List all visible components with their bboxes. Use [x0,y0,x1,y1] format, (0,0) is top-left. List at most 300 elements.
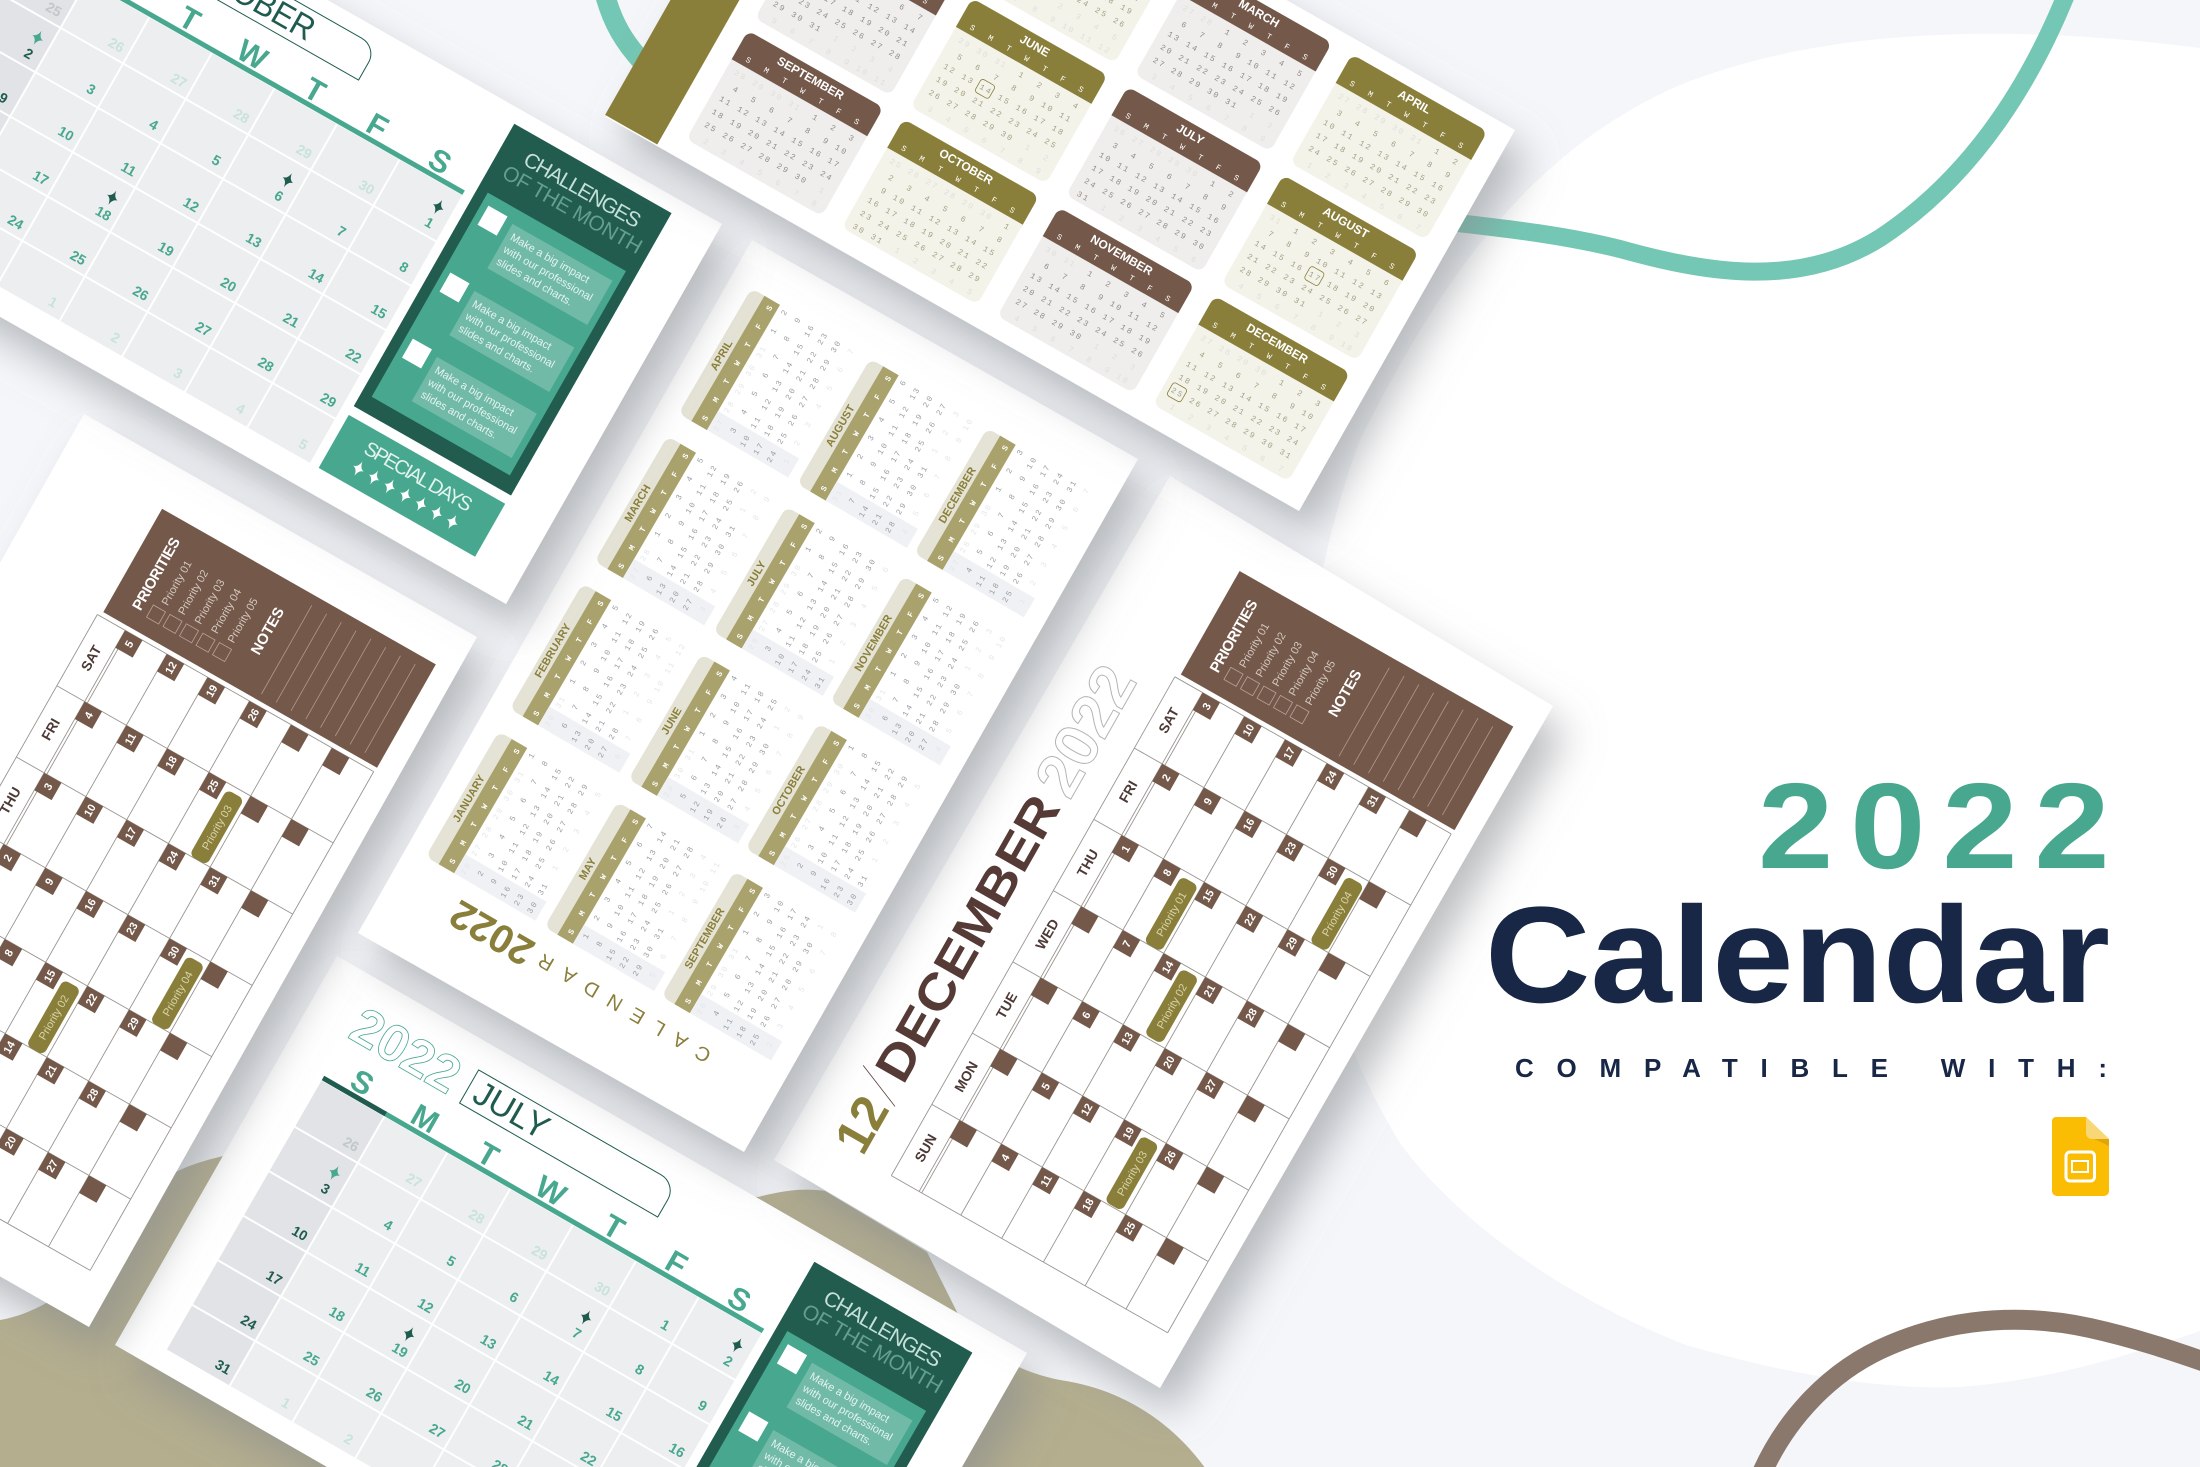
December calendar grid: 13 [1120,1030,1136,1047]
month: June: 19 20 21 22 23 24 25 [702,690,785,823]
card: April: 17 18 19 20 21 22 23 [1314,132,1445,211]
card: August: 21 22 23 24 25 26 27 [1245,252,1376,332]
month label box [161,0,377,80]
December calendar grid: TUE [993,989,1020,1022]
card: July: 26 27 28 29 30 [1112,125,1207,184]
card: November: 1 2 3 4 5 [1079,266,1174,325]
card: November: NOVEMBER [1088,232,1155,278]
challenges of the month panel: Make a big impact [470,299,553,353]
icon: Google Slides [2052,1117,2109,1196]
card: April [1290,54,1487,240]
month: July [713,500,900,696]
month: August: 7 8 9 10 11 12 13 [844,379,927,512]
teal ribbon curve right [1440,0,2068,272]
month: March: 27 28 29 30 31 [681,516,743,613]
month: October: 9 10 11 12 13 14 15 [806,751,888,884]
card: October: 25 26 27 28 29 30 [888,157,1000,227]
July day grid: 2 [721,1352,736,1370]
month: May: 22 23 24 25 26 27 28 [618,838,701,970]
month: December [914,422,1101,617]
month: February: 6 7 8 9 10 11 12 [557,604,639,737]
card: July [1066,87,1263,272]
weekday header: S [422,141,458,182]
panel: July calendar sheet [115,956,1027,1467]
month: February: 13 14 15 16 17 18 19 [570,612,653,744]
challenges of the month panel: OF THE MONTH [798,1300,946,1398]
brown ribbon curve [1761,1320,2200,1467]
card: August: 1 2 3 4 5 6 [1285,224,1398,293]
month: December: 25 26 27 28 29 30 31 [1001,472,1084,604]
December calendar grid: 5 [1040,1081,1053,1092]
card: November: 27 28 29 30 [1014,298,1090,347]
October day grid: 24 [5,211,27,233]
month: October: 25 26 27 28 29 30 [779,754,851,869]
card: November: 20 21 22 23 24 25 26 [1021,285,1152,364]
priority pills: Priority 03 [1115,1149,1150,1198]
December calendar grid: FRI [1115,778,1141,805]
October day grid: 5 [296,435,311,453]
month: January: 2 3 4 5 6 7 8 [473,752,555,885]
month: June [628,648,815,843]
July day grid: 19 [389,1339,411,1361]
month: December: DECEMBER [937,465,979,526]
weekday header: S [344,1062,380,1103]
July day grid: 31 [212,1356,234,1378]
December calendar grid: 6 [1080,1010,1094,1021]
October day grid: 8 [397,258,412,276]
card: April: APRIL [1395,87,1434,117]
month: September: 1 2 3 [738,884,778,943]
month: January: 30 31 [526,874,555,916]
December calendar grid: 25 [1122,1220,1138,1237]
card: March: 6 7 8 9 10 11 12 [1173,17,1304,97]
March calendar grid: SAT [77,642,105,674]
weekday header: T [173,0,207,39]
month: January: 9 10 11 12 13 14 15 [486,759,569,892]
month: October: 1 [843,736,862,759]
card: March: 1 2 3 4 5 [1217,25,1311,84]
March calendar grid: 28 [85,1087,101,1103]
December calendar grid: 26 [1162,1149,1179,1166]
card: September: 11 12 13 14 15 16 17 [717,95,848,175]
March calendar grid: 30 [166,944,182,961]
priorities and notes panel: Priority 05 [1303,659,1338,708]
card: April: 3 4 5 6 7 8 9 [1329,106,1459,185]
March calendar grid: 19 [204,683,221,700]
March calendar grid: 18 [164,754,180,771]
March calendar grid: 27 [44,1158,61,1175]
March calendar grid: 16 [83,897,99,913]
month: March: 1 2 [735,480,764,521]
October day grid: 20 [218,274,240,295]
March calendar grid: 29 [125,1016,142,1032]
July day grid: 11 [352,1259,373,1280]
card: September: 1 [811,183,833,201]
month: January: 16 17 18 19 20 21 22 [499,767,582,900]
December calendar grid: 15 [1201,888,1217,904]
card: September: 1 2 3 [804,110,863,149]
card: November: 4 5 6 7 8 9 10 [1006,311,1137,391]
challenges of the month panel: CHALLENGES [819,1287,945,1372]
card: June: 3 4 5 6 7 8 9 [919,102,1050,181]
December calendar grid: SAT [1155,704,1182,736]
month: April: 1 2 [766,301,795,342]
July day grid: 30 [592,1278,613,1300]
card: July: 1 2 3 4 5 6 [1093,200,1206,270]
month: August: 1 2 3 4 5 6 [842,371,914,486]
card: November: 6 7 8 9 10 11 12 [1036,259,1167,338]
December calendar grid [891,677,1451,1333]
card: July: 31 [1075,190,1097,208]
card: October: 9 10 11 12 13 14 15 [873,183,1004,263]
month: February: 27 28 [597,719,626,760]
card: September: 28 29 30 31 [732,69,809,118]
heading: Calendar: Calendar [1485,879,2110,1032]
July day grid: 1 [658,1316,673,1334]
month: July: 10 11 12 13 14 15 16 [774,535,856,667]
month: September: 28 29 30 31 [695,939,746,1017]
July day grid: 28 [466,1206,488,1227]
card: August: 28 29 30 31 [1238,265,1314,314]
month: June: 3 4 5 6 7 8 9 [729,705,811,838]
card: August [1222,175,1419,361]
panel: March priorities calendar sheet [0,414,477,1327]
month: October: OCTOBER [770,764,808,817]
priorities and notes panel: NOTES [1325,667,1365,720]
month: May: 1 2 3 4 [663,845,714,923]
challenges of the month panel: slides and charts. [494,256,574,309]
month: March: 27 28 [628,540,657,581]
December calendar grid: 17 [1282,745,1298,762]
October day grid: 27 [193,318,214,340]
December calendar grid: 23 [1283,840,1299,857]
card: March: 20 21 22 23 24 25 26 [1158,43,1289,123]
October day grid: 2 [21,45,36,62]
month: November: 1 2 3 4 5 [885,588,947,685]
July day grid: 14 [541,1367,562,1389]
December calendar grid: 12 [1079,1102,1096,1118]
month: July: S M T W T F S [736,521,811,641]
month: October: 1 2 3 4 5 [867,775,928,871]
month: January: 1 2 3 4 5 [547,783,609,879]
October day grid: 29 [318,389,339,411]
challenges of the month panel: with our professional [462,310,557,371]
month: October: S M T W T F S [768,738,843,858]
priorities and notes panel: Priority 02 [176,568,211,617]
month: May: 1 2 3 4 5 6 7 [578,814,661,947]
month: April: 27 28 29 30 31 [712,337,773,434]
card: May [755,0,952,95]
October day grid [0,0,462,463]
card: October: 1 2 3 4 5 [887,243,981,302]
December calendar grid: 30 [1325,864,1341,881]
October day grid: 4 [147,116,161,134]
card: June: 1 2 [1017,140,1057,168]
card: July: 10 11 12 13 14 15 16 [1097,151,1228,231]
priorities and notes panel: Priority 01 [1237,621,1272,670]
card: April: 10 11 12 13 14 15 16 [1321,119,1452,198]
month: September: 2 3 4 5 6 7 8 [762,923,844,1055]
card: October [842,119,1039,305]
March calendar grid: 21 [43,1063,60,1080]
October day grid: 15 [368,300,390,322]
challenges of the month panel: with our professional [425,376,519,437]
July day grid: 5 [444,1252,459,1270]
card: June: 19 20 21 22 23 24 25 [934,76,1065,155]
December calendar grid: MON [951,1059,981,1095]
October day grid: 6 [272,187,287,205]
priorities and notes panel [103,509,436,768]
December calendar grid: 10 [1241,722,1257,739]
month: August: AUGUST [824,403,858,449]
December calendar grid: 9 [1202,796,1215,807]
challenges of the month panel: Make a big impact [508,232,591,286]
card: November [997,207,1195,393]
card: October: OCTOBER [937,146,996,188]
challenges of the month panel: CHALLENGES [520,148,645,233]
priorities and notes panel [1181,571,1513,830]
July day grid: 6 [507,1288,522,1306]
month: March: 3 4 5 6 7 8 9 [695,487,777,620]
month: September: 25 26 27 28 29 30 [748,933,820,1048]
December calendar grid: 16 [1241,817,1258,833]
March calendar grid: 8 [3,948,16,959]
July day grid: 7 [570,1324,584,1342]
month: November: S M T W T F S [853,590,928,711]
month: October: 30 31 [846,866,875,907]
month: February: 1 2 3 4 5 [618,627,679,723]
month: March: S M T W T F S [617,450,693,571]
October day grid: 7 [334,222,349,240]
priority pills: Priority 04 [161,970,196,1018]
priority pills: Priority 02 [1155,982,1190,1031]
month: May: 8 9 10 11 12 13 14 [591,822,674,955]
March calendar grid: 9 [43,876,57,888]
month: April: 24 25 26 27 28 29 30 [765,332,848,465]
month: February: 6 7 8 9 10 11 12 [610,635,693,768]
July day grid [167,1081,761,1467]
month label box: JULY [467,1074,556,1148]
month: July: 1 2 3 4 5 6 [824,558,896,672]
month: April: 3 4 5 6 7 8 9 [725,309,808,441]
card: September: 18 19 20 21 22 23 24 [710,108,841,188]
month: April: 17 18 19 20 21 22 23 [752,324,835,457]
priority pills: Priority 03 [200,803,235,852]
card: April: 27 28 29 30 31 [1336,93,1431,152]
month: February: 20 21 22 23 24 25 26 [583,619,666,752]
card: March: 3 4 5 6 7 8 9 [1143,69,1274,149]
weekday header [322,1071,764,1334]
month: March: 6 7 8 9 10 11 12 [642,456,724,589]
March calendar grid: 4 [83,709,96,721]
July day grid: 3 [318,1180,333,1198]
month: December: 1 2 3 4 5 6 7 [1014,479,1097,612]
weekday header: W [529,1169,573,1214]
month: November: 27 28 29 30 [917,675,968,752]
card: December: 1 2 3 [1271,375,1330,414]
background white blob [1301,34,2200,1387]
priorities and notes panel: PRIORITIES [129,535,184,613]
weekday header: M [405,1097,445,1140]
March calendar grid: 2 [2,853,15,864]
weekday header: S [722,1279,757,1320]
card: December: S M T W T F S [1210,321,1329,394]
card: September [686,31,884,216]
October day grid: 10 [55,123,77,144]
panel: twelve month calendar sheet [358,240,1138,1152]
October day grid: 25 [68,247,89,269]
October day grid: 26 [106,34,127,56]
outlined year 2022: 2022 [341,997,470,1105]
month: July: JULY [745,559,769,589]
July day grid: 13 [478,1331,499,1353]
March calendar grid: 25 [205,778,222,795]
March calendar grid: 15 [42,968,59,985]
month: November [830,570,1017,765]
month: May: 15 16 17 18 19 20 21 [605,830,687,963]
month: May: MAY [577,855,599,882]
October day grid: 14 [306,265,327,287]
March calendar grid: 20 [3,1134,19,1151]
card: July: 17 18 19 20 21 22 23 [1090,164,1220,244]
month: October: 23 24 25 26 27 28 29 [832,767,915,900]
card: June: S M T W T F S [968,24,1087,96]
December calendar grid: 4 [999,1152,1013,1164]
month: February: 30 31 [543,688,573,729]
card: October: 16 17 18 19 20 21 22 [865,196,996,276]
challenges of the month panel: slides and charts. [419,389,499,442]
month: May: 5 6 7 8 9 10 11 [645,853,727,986]
July day grid: 24 [238,1311,260,1333]
month: August: 14 15 16 17 18 19 20 [858,387,940,520]
month: August: 28 29 30 31 [884,457,935,535]
October day grid: 11 [118,158,139,180]
July day grid: 29 [529,1242,551,1264]
card: March: 13 14 15 16 17 18 19 [1166,30,1296,110]
month: April: APRIL [709,338,736,373]
month: January: JANUARY [451,772,488,825]
card: August: AUGUST [1320,204,1372,242]
card: July: 1 2 [1202,176,1243,205]
olive side band [605,0,874,145]
card: September: 4 5 6 7 8 9 10 [725,82,855,162]
October day grid: 29 [293,141,315,162]
July day grid: 16 [666,1439,688,1461]
July day grid: 25 [301,1348,322,1369]
card: November: S M T W T F S [1055,233,1173,306]
card: August: S M T W T F S [1279,200,1398,273]
July day grid: 26 [364,1384,385,1405]
October day grid: 4 [233,400,248,418]
card: July: JULY [1174,121,1207,148]
month: September [661,865,848,1061]
month: March: 1 2 3 4 5 [650,449,711,545]
month: December: 18 19 20 21 22 23 24 [988,464,1070,597]
March calendar grid: 26 [246,707,262,723]
month: January: 23 24 25 26 27 28 29 [513,775,595,908]
card: December: 4 5 6 7 8 9 10 [1191,347,1322,427]
priorities and notes panel: Priority 03 [1270,640,1305,689]
month: February [510,577,696,773]
month: September: 4 5 6 7 8 9 10 [708,892,791,1024]
month: June: JUNE [659,706,685,737]
weekday header: T [597,1207,631,1247]
card: May: 1 2 3 4 [825,31,902,80]
card: June: 1 2 3 4 [1010,67,1087,116]
card: September: 2 3 4 5 6 7 8 [695,134,826,214]
month: October: 2 3 4 5 6 7 8 [792,744,875,876]
card: June: 26 27 28 29 30 [927,89,1021,148]
month: March [594,430,781,625]
card: August: 1 2 3 [1310,307,1369,345]
December calendar grid: 18 [1080,1197,1097,1213]
card: February [979,0,1176,63]
month: April: 10 11 12 13 14 15 16 [739,316,821,449]
October day grid: 18 [93,202,114,224]
card: August: 14 15 16 17 18 19 20 [1253,239,1383,319]
July day grid: 10 [289,1222,311,1244]
card: December: 27 28 29 30 [1199,334,1275,383]
month: January [428,734,600,920]
olive background blob [0,1152,1210,1467]
December title: DECEMBER [864,786,1071,1091]
challenges of the month panel: with our professional [500,243,595,304]
July day grid: 21 [515,1411,537,1433]
month: November: 30 31 [864,680,893,721]
March calendar grid: 14 [2,1039,18,1056]
card: October: 2 3 4 5 6 7 8 [880,170,1011,250]
month: November: NOVEMBER [853,613,895,674]
priorities and notes panel: PRIORITIES [1207,597,1261,676]
December calendar grid: 27 [1203,1078,1219,1094]
month: June: 12 13 14 15 16 17 18 [689,682,771,815]
month: June: 26 27 28 29 30 [715,734,777,830]
weekday header: T [298,70,332,110]
priorities and notes panel: Priority 04 [1287,649,1322,698]
priorities and notes panel: Priority 03 [193,578,228,626]
December calendar grid: SUN [911,1131,940,1165]
card: October: 23 24 25 26 27 28 29 [858,209,989,289]
priorities and notes panel: Priority 01 [160,559,195,608]
July day grid: 26 [340,1133,362,1155]
December title: 12 [824,1087,900,1163]
priority pills [28,792,242,1054]
card: September: SEPTEMBER [775,54,847,103]
card: May: 5 6 7 8 9 10 11 [764,13,894,93]
card: May: 29 30 31 [771,0,830,39]
October day grid: 2 [108,329,123,346]
challenges of the month panel: slides and charts. [456,323,536,376]
card: July: 24 25 26 27 28 29 30 [1082,177,1213,257]
month: June: 1 2 3 4 [694,666,745,744]
month: August: 21 22 23 24 25 26 27 [871,394,953,527]
December calendar grid: 3 [1201,701,1214,712]
month: November: 1 2 3 [960,620,1000,679]
December calendar grid: THU [1073,846,1102,879]
December calendar grid: 22 [1242,912,1259,928]
October day grid: 3 [171,364,186,382]
December calendar grid: 14 [1160,958,1177,976]
March calendar grid: 17 [123,826,140,842]
month: July: 1 2 [800,519,830,560]
card: June [910,0,1108,184]
March calendar grid: 23 [124,921,141,937]
card: October: 1 [996,219,1018,237]
card: August: 31 [1267,213,1290,231]
month: December: 4 5 6 7 8 9 10 [961,448,1044,581]
month: July: 3 4 5 6 7 8 9 [760,527,843,660]
month: February: S M T W T F S [532,598,608,718]
